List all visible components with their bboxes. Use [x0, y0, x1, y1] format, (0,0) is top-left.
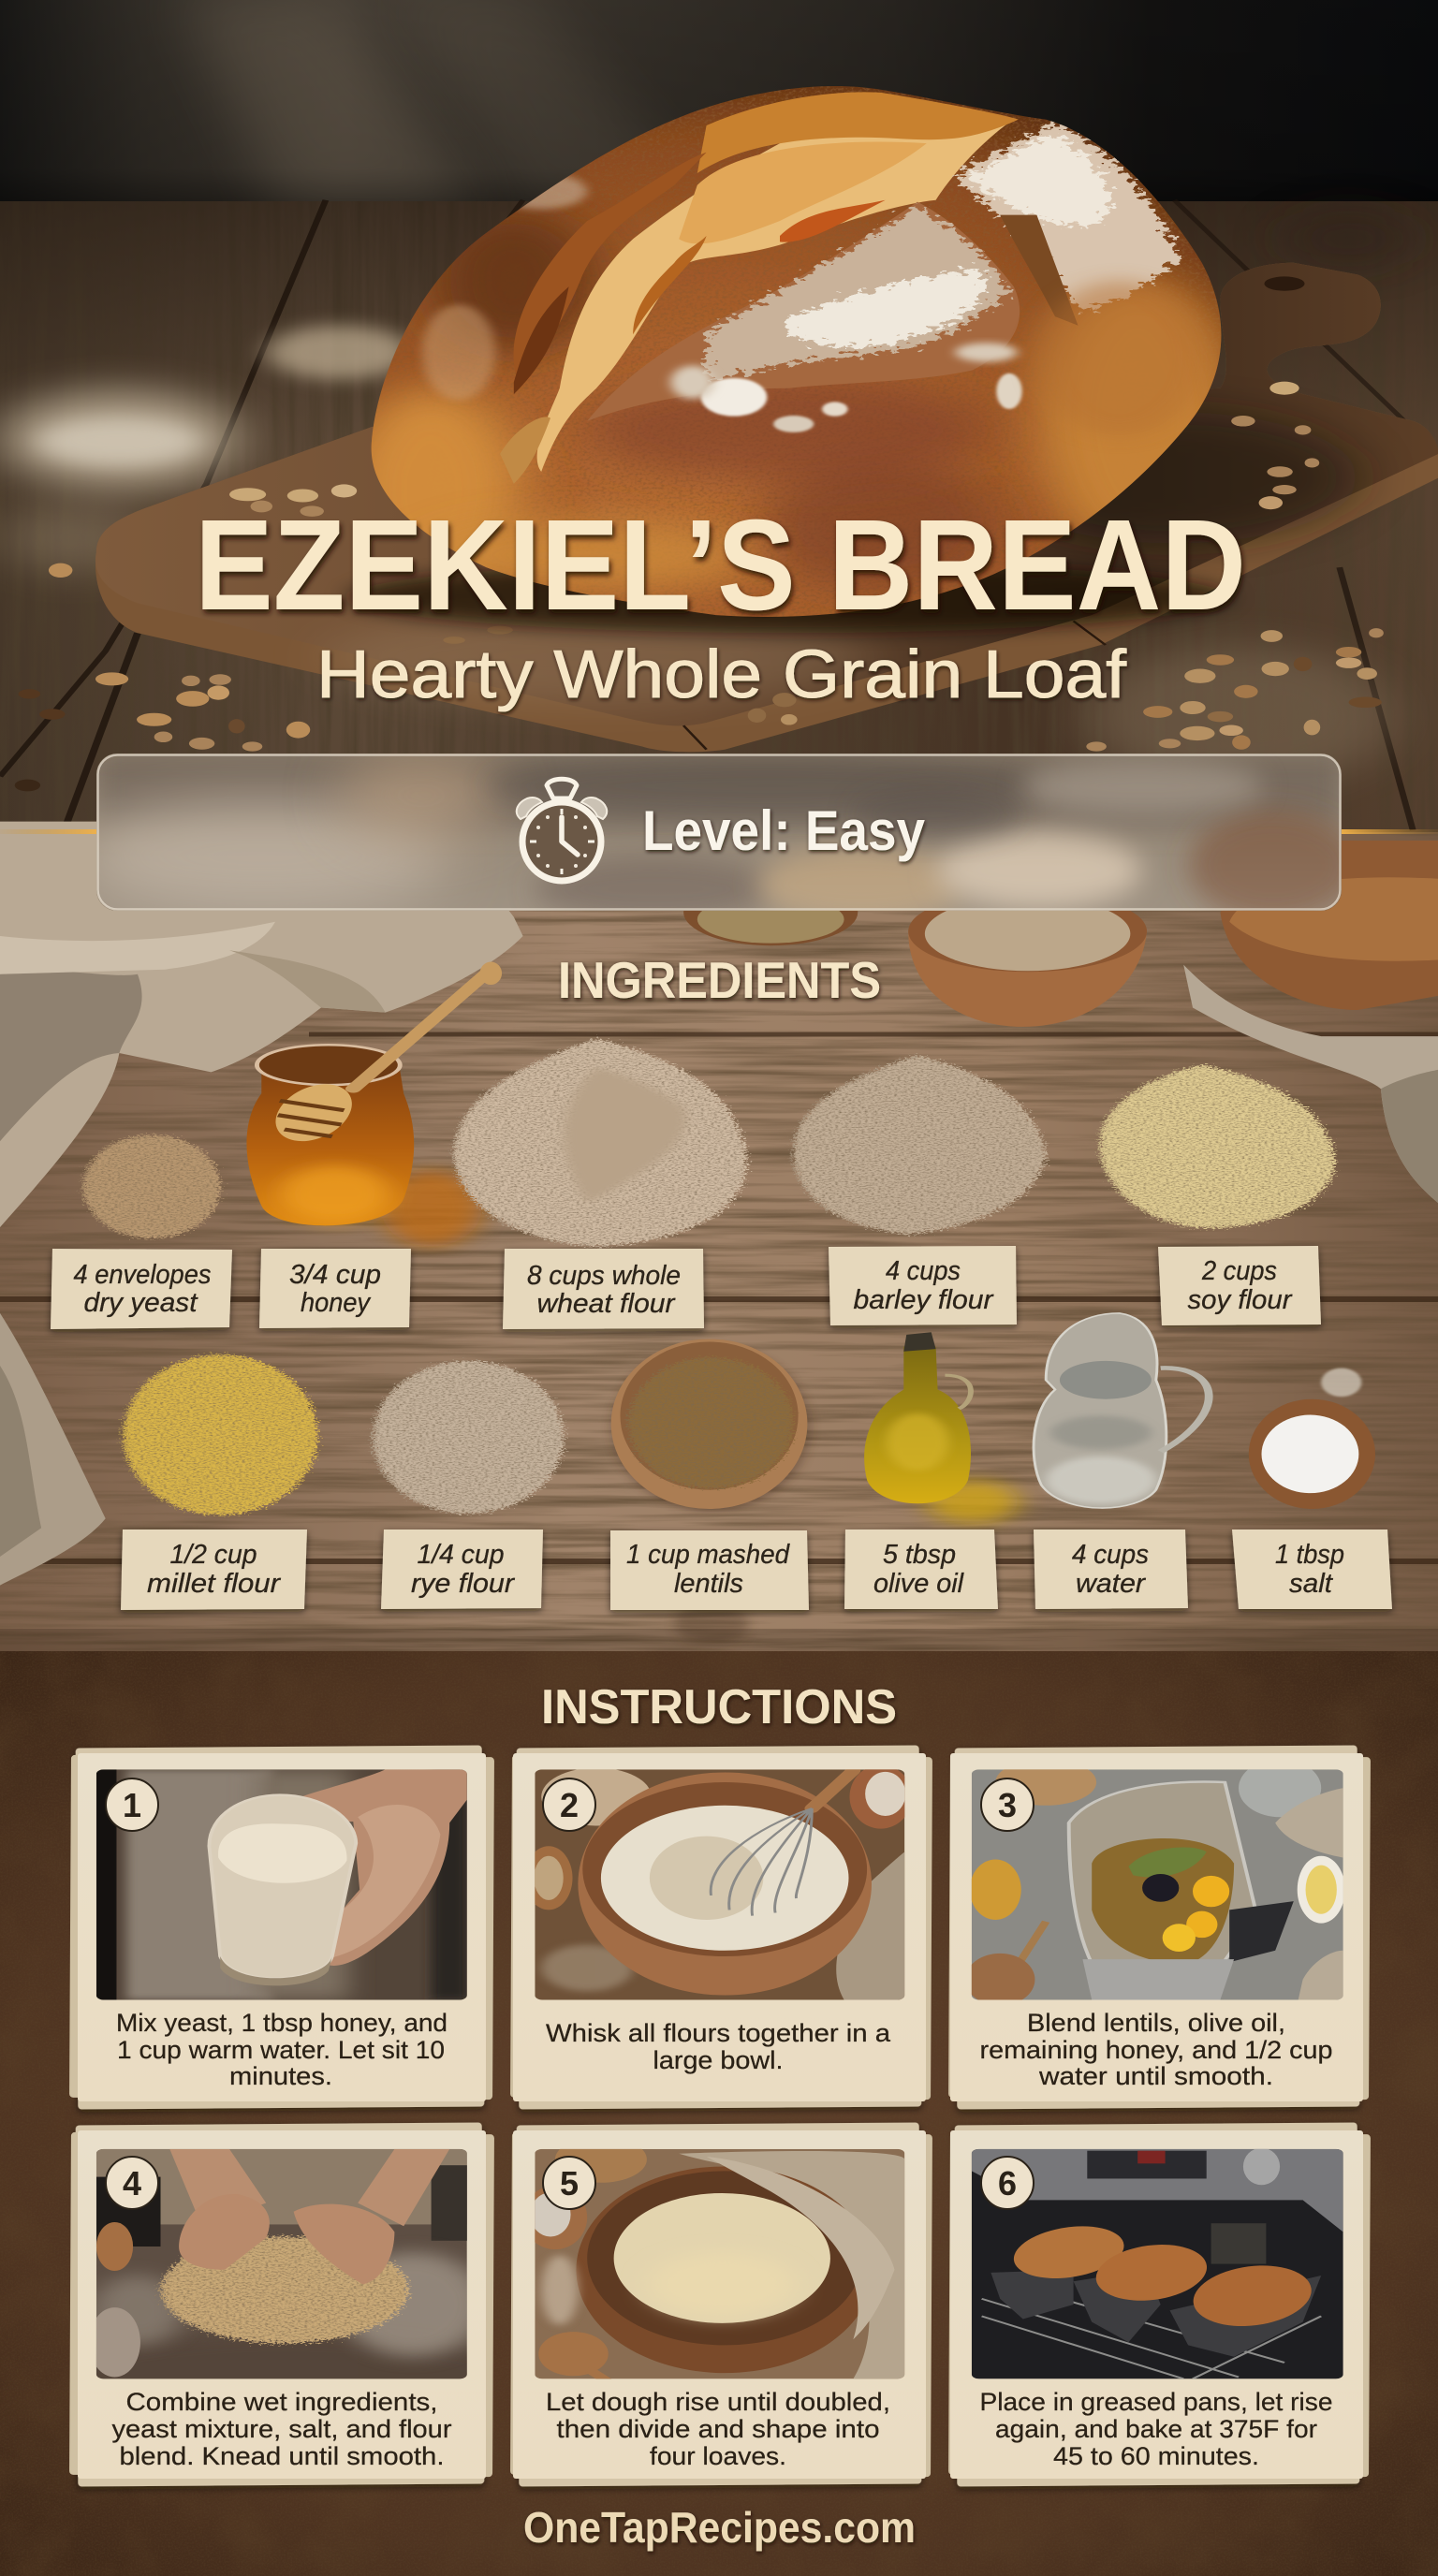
olive oil bottle: [864, 1332, 1019, 1523]
number badge: 5: [560, 2164, 579, 2203]
ingredient label: 1 tbsp salt: 1 tbsp: [1275, 1540, 1344, 1570]
gold divider line beside level panel: [0, 829, 1438, 834]
step card 3: [948, 1745, 1371, 2109]
millet flour pile: [123, 1354, 317, 1515]
number badge: [106, 2157, 158, 2209]
step text: four loaves.: [650, 2442, 786, 2470]
ingredient label: 4 envelopes dry yeast: 4 envelopes: [73, 1260, 212, 1290]
step text: again, and bake at 375F for: [995, 2415, 1317, 2443]
ingredient label: 5 tbsp olive oil: [844, 1530, 998, 1609]
ingredient label: 1 tbsp salt: [1232, 1530, 1392, 1609]
image: risen dough in bowl: [523, 2136, 904, 2386]
icon: stopwatch: [517, 779, 607, 881]
floured right cap: [954, 123, 1179, 311]
ingredient label: 4 cups water: water: [1076, 1569, 1146, 1599]
ingredient label: 4 cups water: [1034, 1530, 1188, 1609]
step text: water until smooth.: [1038, 2062, 1273, 2090]
image: whisking flour in bowl: [525, 1764, 912, 1999]
bowl of lentils: [611, 1339, 810, 1512]
step text: blend. Knead until smooth.: [120, 2442, 444, 2470]
number badge: [981, 2157, 1034, 2209]
step card 5: [510, 2122, 932, 2486]
bowl of salt: [1249, 1368, 1375, 1509]
ingredient label: 2 cups soy flour: [1158, 1246, 1321, 1325]
bowls at top of ingredients table: [683, 841, 1438, 1027]
step text: 45 to 60 minutes.: [1053, 2442, 1259, 2470]
number badge: [981, 1778, 1034, 1831]
soy flour pile: [1100, 1065, 1335, 1228]
lower-left golden crust: [340, 388, 523, 592]
ingredient label: 3/4 cup honey: honey: [301, 1288, 371, 1318]
step text: [546, 2019, 891, 2074]
number badge: 6: [998, 2164, 1017, 2203]
step text: Whisk all flours together in a: [546, 2019, 891, 2047]
step text: yeast mixture, salt, and flour: [112, 2415, 451, 2443]
instructions background: [0, 1651, 1438, 2576]
ingredient label: 1 cup mashed lentils: 1 cup mashed: [626, 1540, 790, 1570]
ingredient label: 1 tbsp salt: salt: [1289, 1569, 1334, 1599]
ingredient label: 4 cups barley flour: [829, 1246, 1017, 1325]
ingredient label: 8 cups whole wheat flour: wheat flour: [537, 1289, 676, 1319]
number badge: 4: [123, 2164, 141, 2203]
ingredient label: 3/4 cup honey: 3/4 cup: [289, 1260, 381, 1290]
step text: then divide and shape into: [556, 2415, 880, 2443]
image: kneading dough: [0, 2149, 578, 2484]
step text: Combine wet ingredients,: [125, 2388, 437, 2416]
ingredient label: 5 tbsp olive oil: olive oil: [873, 1569, 965, 1599]
ingredient label: 1/2 cup millet flour: [121, 1530, 307, 1610]
ingredients heading: INGREDIENTS: [558, 951, 881, 1009]
floured central flap: [587, 202, 1020, 421]
ingredient label: 1 cup mashed lentils: lentils: [674, 1569, 743, 1599]
number badge: 1: [123, 1786, 141, 1824]
ingredient art: top row: [82, 962, 1335, 1247]
hero background: dark wall and rustic table: [0, 0, 1438, 847]
linen cloths: [0, 822, 1438, 1586]
subtitle: Hearty Whole Grain Loaf: [316, 637, 1127, 712]
cutting board: [95, 263, 1438, 752]
step text: 1 cup warm water. Let sit 10: [117, 2036, 445, 2064]
seeds scattered around board: [15, 382, 1384, 791]
image: blender with lentils: [965, 1759, 1345, 2006]
step card 2: [510, 1745, 932, 2109]
barley flour pile: [793, 1056, 1046, 1235]
number badge: 2: [560, 1786, 579, 1824]
ingredient label: 1/2 cup millet flour: 1/2 cup: [170, 1540, 257, 1570]
level text: Level: Easy: [642, 799, 926, 862]
step text: minutes.: [229, 2062, 332, 2090]
number badge: [106, 1778, 158, 1831]
step text: [546, 2388, 890, 2470]
honey jar: [246, 962, 502, 1247]
ingredient label: 2 cups soy flour: 2 cups: [1201, 1256, 1277, 1286]
image: glass of yeast mixture: [96, 1769, 468, 1999]
ingredient label: 1 cup mashed lentils: [610, 1530, 809, 1610]
ingredient label: 1/4 cup rye flour: rye flour: [411, 1569, 515, 1599]
ingredient label: 4 envelopes dry yeast: dry yeast: [84, 1288, 198, 1318]
step text: [116, 2009, 448, 2090]
footer website: OneTapRecipes.com: [523, 2503, 916, 2552]
step text: Place in greased pans, let rise: [979, 2388, 1333, 2416]
step text: [979, 2009, 1333, 2090]
ingredient label: 5 tbsp olive oil: 5 tbsp: [883, 1540, 956, 1570]
step text: large bowl.: [653, 2046, 783, 2074]
step text: Blend lentils, olive oil,: [1027, 2009, 1285, 2037]
loaf of bread: [340, 72, 1248, 633]
number badge: [543, 2157, 595, 2209]
dry yeast pile: [82, 1135, 220, 1238]
instructions heading: INSTRUCTIONS: [541, 1680, 897, 1734]
ingredient label: 4 cups barley flour: 4 cups: [886, 1256, 961, 1286]
ingredient label: 1/4 cup rye flour: 1/4 cup: [418, 1540, 504, 1570]
ingredient label: 8 cups whole wheat flour: 8 cups whole: [527, 1261, 681, 1291]
glass water jug: [1034, 1313, 1209, 1508]
ingredient label: 1/2 cup millet flour: millet flour: [147, 1569, 281, 1599]
title: EZEKIEL’S BREAD: [195, 493, 1246, 637]
ingredient label: 2 cups soy flour: soy flour: [1187, 1285, 1293, 1315]
step text: remaining honey, and 1/2 cup: [979, 2036, 1333, 2064]
ingredient label: 4 envelopes dry yeast: [51, 1249, 232, 1329]
number badge: [543, 1778, 595, 1831]
image: loaves baking in oven: [972, 2148, 1343, 2378]
panel: level easy: [75, 754, 1357, 922]
step card 4: [0, 2122, 578, 2487]
ingredient label: 4 cups water: 4 cups: [1072, 1540, 1149, 1570]
step card 1: [69, 1745, 494, 2110]
ingredient label: 8 cups whole wheat flour: [503, 1249, 704, 1329]
ingredient label: 1/4 cup rye flour: [381, 1530, 543, 1609]
ingredient label: 3/4 cup honey: [259, 1249, 411, 1328]
ingredients table background: [0, 832, 1438, 1654]
number badge: 3: [998, 1786, 1017, 1824]
step text: Let dough rise until doubled,: [546, 2388, 890, 2416]
rye flour pile: [373, 1361, 564, 1514]
step card 6: [948, 2122, 1371, 2486]
step text: [979, 2388, 1333, 2470]
whole wheat flour pile: [454, 1039, 746, 1247]
ingredient label: 4 cups barley flour: barley flour: [854, 1285, 994, 1315]
ingredient art: bottom row: [123, 1313, 1375, 1523]
step text: Mix yeast, 1 tbsp honey, and: [116, 2009, 448, 2037]
open crumb area: [537, 112, 1009, 472]
step text: [112, 2388, 451, 2470]
